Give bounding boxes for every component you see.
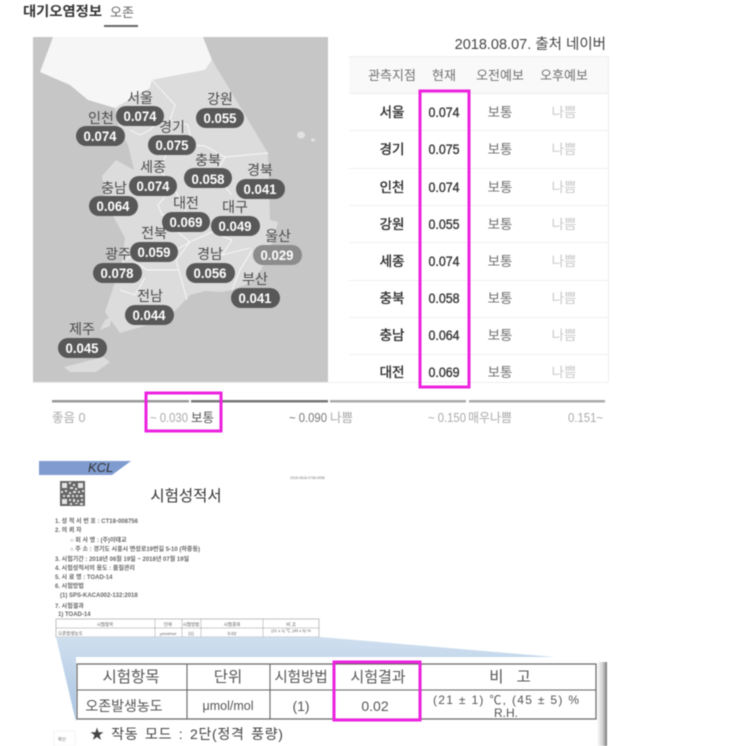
small results table: 0.02 (228, 631, 237, 636)
legend scale: 좋음 0 (52, 411, 85, 425)
region: 세종: 세종 (140, 159, 166, 175)
ozone table: 나쁨 (552, 365, 576, 380)
ozone table: 오전예보 (476, 68, 524, 83)
enlarged results table: 오존발생농도 (85, 698, 163, 714)
ozone table: 나쁨 (552, 105, 576, 120)
region: 울산: 울산 (265, 228, 291, 244)
region: 충남: 충남 (101, 180, 127, 196)
ozone table: 보통 (488, 328, 512, 343)
test report document thumbnail: 6. 시험방법 (55, 582, 84, 590)
region: 충북: 0.058 (192, 171, 225, 187)
region: 전북 (130, 225, 178, 262)
ozone table: 0.069 (428, 364, 460, 380)
small results table: 오존발생농도 (58, 630, 83, 636)
small results table: 시험방법 (183, 621, 199, 627)
small results table: 시험항목 (97, 621, 113, 628)
small confirmation stamp (54, 731, 75, 746)
region: 광주: 광주 (105, 246, 131, 262)
region: 인천 (76, 110, 125, 146)
ozone table: 나쁨 (552, 254, 576, 269)
ozone table: 보통 (488, 180, 512, 195)
ozone table: 충북 (380, 291, 404, 306)
heading: air pollution info (23, 4, 138, 27)
enlarged results table: 0.02 (361, 698, 389, 714)
region: 경남: 0.056 (194, 265, 227, 281)
legend scale: 나쁨 (330, 411, 353, 425)
enlarged results table: 단위 (214, 668, 242, 686)
enlarged results panel (76, 657, 607, 746)
ozone table: 0.064 (428, 327, 460, 343)
ozone table: 강원 (380, 217, 404, 232)
region: 경기: 경기 (159, 119, 185, 135)
ozone table: 보통 (488, 105, 512, 120)
small results table: (21 ± 1) ℃, (45 ± 5) % (271, 628, 311, 633)
region: 충남: 0.064 (96, 198, 130, 214)
ozone table: 나쁨 (552, 142, 576, 157)
legend scale: ~ 0.090 (289, 411, 327, 425)
region: 인천: 0.074 (84, 128, 117, 144)
region: 부산 (231, 271, 280, 308)
region: 충남 (89, 180, 138, 216)
region: 광주 (93, 246, 142, 283)
panel shadow (597, 662, 607, 746)
region: 울산 (253, 228, 302, 265)
test report document thumbnail (39, 460, 325, 637)
ozone table (33, 56, 608, 382)
ozone table: 관측지점 (368, 68, 416, 83)
test report document thumbnail: 5. 시 료 명 : TOAD-14 (55, 573, 113, 581)
ozone table: 현재 (432, 68, 456, 83)
region: 인천: 인천 (88, 110, 114, 126)
heading: air pollution info: 대기오염정보 (23, 4, 102, 19)
test report document thumbnail: 2018-0618-0738-0058 (290, 476, 325, 480)
enlarged results table (77, 664, 596, 720)
region: 대전 (162, 195, 210, 232)
legend scale (52, 400, 605, 425)
ozone table: 나쁨 (552, 291, 576, 306)
region: 부산: 부산 (242, 271, 268, 287)
test report document thumbnail: 2. 의 뢰 자 (55, 526, 82, 534)
region: 강원: 강원 (207, 91, 233, 107)
report title: 시험성적서 (150, 487, 222, 505)
enlarged results table: 시험항목 (102, 668, 160, 686)
region: 세종: 0.074 (136, 178, 170, 194)
small results table: 비 고 (286, 621, 296, 628)
ozone table: 0.075 (428, 141, 460, 157)
region: 충북: 충북 (195, 152, 221, 168)
region: 경기: 0.075 (156, 137, 189, 153)
enlarged results table: (21 ± 1) ℃, (45 ± 5) % (433, 693, 579, 707)
region: 서울 (116, 90, 164, 126)
ozone table: 세종 (380, 254, 404, 269)
region: 경남: 경남 (197, 246, 223, 262)
ozone table: 0.074 (428, 104, 460, 120)
small results table: 단위 (164, 621, 172, 628)
ozone table: 대전 (380, 365, 404, 380)
legend scale: 0.151~ (568, 411, 603, 425)
region: 제주: 0.045 (66, 340, 99, 356)
region: 전남: 전남 (137, 288, 163, 304)
ozone table: 충남 (380, 328, 404, 343)
ozone table: 보통 (488, 254, 512, 269)
region: 광주: 0.078 (100, 265, 134, 281)
ozone table: 보통 (488, 142, 512, 157)
region: 서울: 0.074 (124, 108, 157, 124)
date and source note: 2018.08.07. 출처 네이버 (455, 36, 606, 53)
report header banner: KCL (88, 460, 113, 475)
region: 세종 (129, 159, 177, 196)
ozone table: 인천 (380, 180, 404, 195)
small confirmation stamp: 확인 (58, 736, 66, 743)
region: 전북: 전북 (141, 225, 167, 241)
region: 대구: 0.049 (218, 218, 252, 234)
ozone table: 0.074 (428, 179, 460, 195)
ozone table: 나쁨 (552, 180, 576, 195)
region: 충북 (184, 152, 232, 188)
region: 대구 (211, 199, 260, 236)
small results table: 시험결과 (224, 621, 240, 628)
legend scale: 보통 (191, 411, 214, 425)
ozone table: 0.055 (428, 216, 460, 232)
region: 강원: 0.055 (204, 110, 237, 126)
test report document thumbnail: 1) TOAD-14 (58, 612, 91, 618)
region: 전남: 0.044 (132, 307, 166, 323)
enlarged results table: 시험방법 (274, 669, 328, 686)
region: 경북: 0.041 (244, 181, 277, 197)
test report document thumbnail: (1) SPS-KACA002-132:2018 (60, 593, 138, 599)
test report document thumbnail: ○ 회 사 명 : (주)이태교 (70, 536, 127, 544)
ozone table: 경기 (380, 142, 404, 157)
region: 대구: 대구 (222, 199, 248, 215)
ozone table: 0.058 (428, 290, 460, 306)
ozone table: 0.074 (428, 253, 460, 269)
enlarged results table: 시험결과 (350, 669, 406, 686)
test report document thumbnail: ○ 주 소 : 경기도 시흥시 면성로19번길 5-10 (하중동) (70, 545, 200, 553)
ozone table: 보통 (488, 291, 512, 306)
enlarged results table: (1) (292, 698, 310, 714)
test report document thumbnail: 4. 시험성적서의 용도 : 품질관리 (55, 564, 135, 572)
ozone table: 보통 (488, 217, 512, 232)
small results table (56, 619, 319, 637)
enlarged results table: R.H. (494, 706, 518, 720)
region: 경북: 경북 (247, 162, 273, 178)
ozone table: 나쁨 (552, 217, 576, 232)
ozone table: 오후예보 (540, 68, 588, 83)
region: 전남 (125, 288, 174, 325)
operating mode note: ★ 작동 모드 : 2단(정격 풍량) (90, 726, 284, 742)
blue zoom wedge (56, 637, 590, 722)
highlight: moderate range (146, 393, 221, 431)
region: 경기 (148, 119, 196, 155)
region: 부산: 0.041 (238, 290, 272, 306)
highlight: current values column (420, 91, 469, 387)
region: 경남 (186, 246, 235, 283)
ozone table: 나쁨 (552, 328, 576, 343)
region: 전북: 0.059 (138, 244, 171, 260)
test report document thumbnail: 3. 시험기간 : 2018년 06월 19일 ~ 2018년 07월 19일 (55, 555, 189, 563)
enlarged results table: μmol/mol (203, 699, 253, 713)
ozone table: 서울 (380, 105, 404, 120)
QR code (60, 481, 85, 506)
legend scale: ~ 0.030 (150, 411, 188, 425)
report header banner (39, 460, 131, 475)
legend scale: ~ 0.150 (428, 411, 466, 425)
heading: air pollution info: 오존 (110, 5, 134, 20)
enlarged results table: 비 고 (489, 668, 531, 686)
region: 제주 (58, 321, 107, 358)
region: 대전: 0.069 (170, 214, 203, 230)
region: 울산: 0.029 (260, 247, 294, 263)
small results table: (1) (188, 631, 194, 636)
test report document thumbnail: 7. 시험결과 (55, 602, 84, 610)
test report document thumbnail: 1. 성 적 서 번 호 : CT18-008756 (55, 517, 139, 525)
ozone table: 보통 (488, 365, 512, 380)
highlight: test result column (334, 662, 420, 720)
legend scale: 매우나쁨 (468, 411, 512, 425)
region: 대전: 대전 (173, 195, 199, 211)
region: 경북 (236, 162, 285, 199)
map of South Korea with ozone readings (33, 37, 328, 382)
small results table: μmol/mol (160, 631, 176, 636)
region: 강원 (196, 91, 244, 128)
region: 서울: 서울 (127, 90, 153, 106)
region: 제주: 제주 (69, 321, 95, 337)
